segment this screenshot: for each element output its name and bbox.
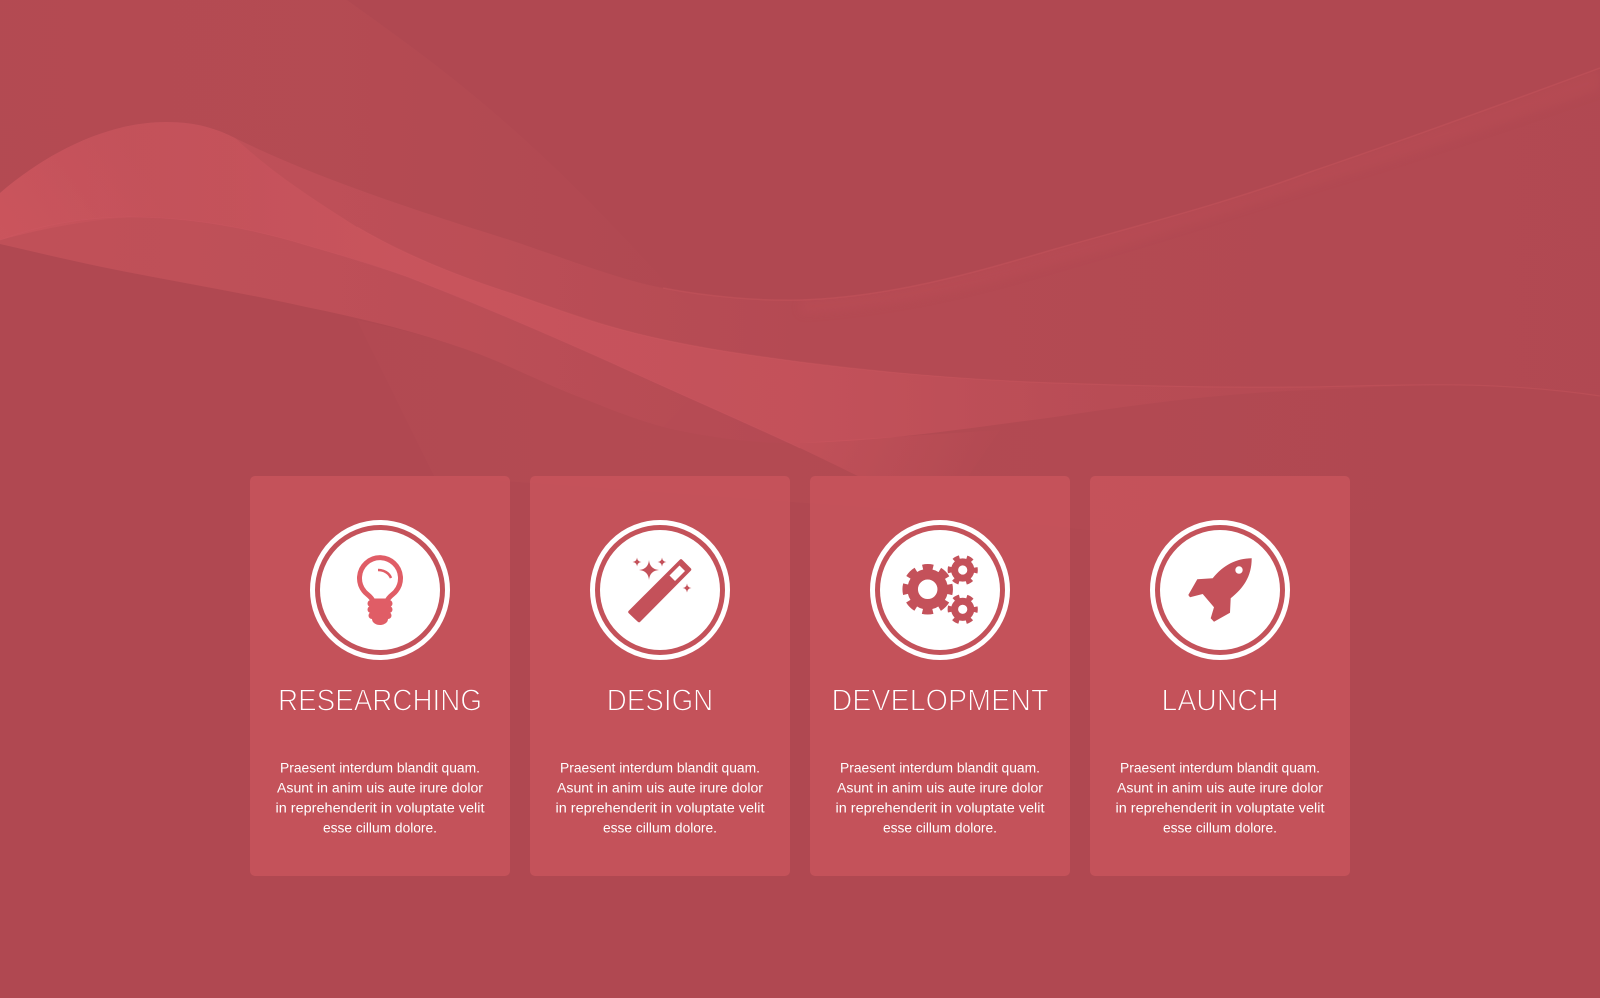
text block: esse cillum dolore. (323, 821, 437, 836)
card background (810, 476, 1070, 876)
panel: researching (250, 476, 510, 876)
icon: rocket in circle (1152, 522, 1288, 658)
icon: gears in circle (872, 522, 1008, 658)
text block: Praesent interdum blandit quam. (1120, 761, 1320, 776)
heading: DESIGN (607, 684, 713, 718)
text block: in reprehenderit in voluptate velit (276, 801, 485, 816)
text block: in reprehenderit in voluptate velit (836, 801, 1045, 816)
card background (1090, 476, 1350, 876)
text block (556, 761, 765, 836)
text block: Praesent interdum blandit quam. (840, 761, 1040, 776)
text block: Asunt in anim uis aute irure dolor (1117, 781, 1324, 796)
heading: RESEARCHING (278, 684, 482, 718)
panel: development (810, 476, 1070, 876)
icon: lightbulb in circle (312, 522, 448, 658)
text block: esse cillum dolore. (883, 821, 997, 836)
panel: design (530, 476, 790, 876)
text block: esse cillum dolore. (603, 821, 717, 836)
text block (836, 761, 1045, 836)
text block: Asunt in anim uis aute irure dolor (837, 781, 1044, 796)
card background (530, 476, 790, 876)
text block (276, 761, 485, 836)
text block: in reprehenderit in voluptate velit (1116, 801, 1325, 816)
text block: Asunt in anim uis aute irure dolor (557, 781, 764, 796)
background wave ribbons (0, 68, 1600, 476)
panel: launch (1090, 476, 1350, 876)
heading: LAUNCH (1162, 684, 1278, 718)
text block: Praesent interdum blandit quam. (560, 761, 760, 776)
text block (1116, 761, 1325, 836)
heading: DEVELOPMENT (832, 684, 1048, 718)
icon: magic wand in circle (592, 522, 728, 658)
text block: Praesent interdum blandit quam. (280, 761, 480, 776)
text block: in reprehenderit in voluptate velit (556, 801, 765, 816)
text block: Asunt in anim uis aute irure dolor (277, 781, 484, 796)
text block: esse cillum dolore. (1163, 821, 1277, 836)
card background (250, 476, 510, 876)
